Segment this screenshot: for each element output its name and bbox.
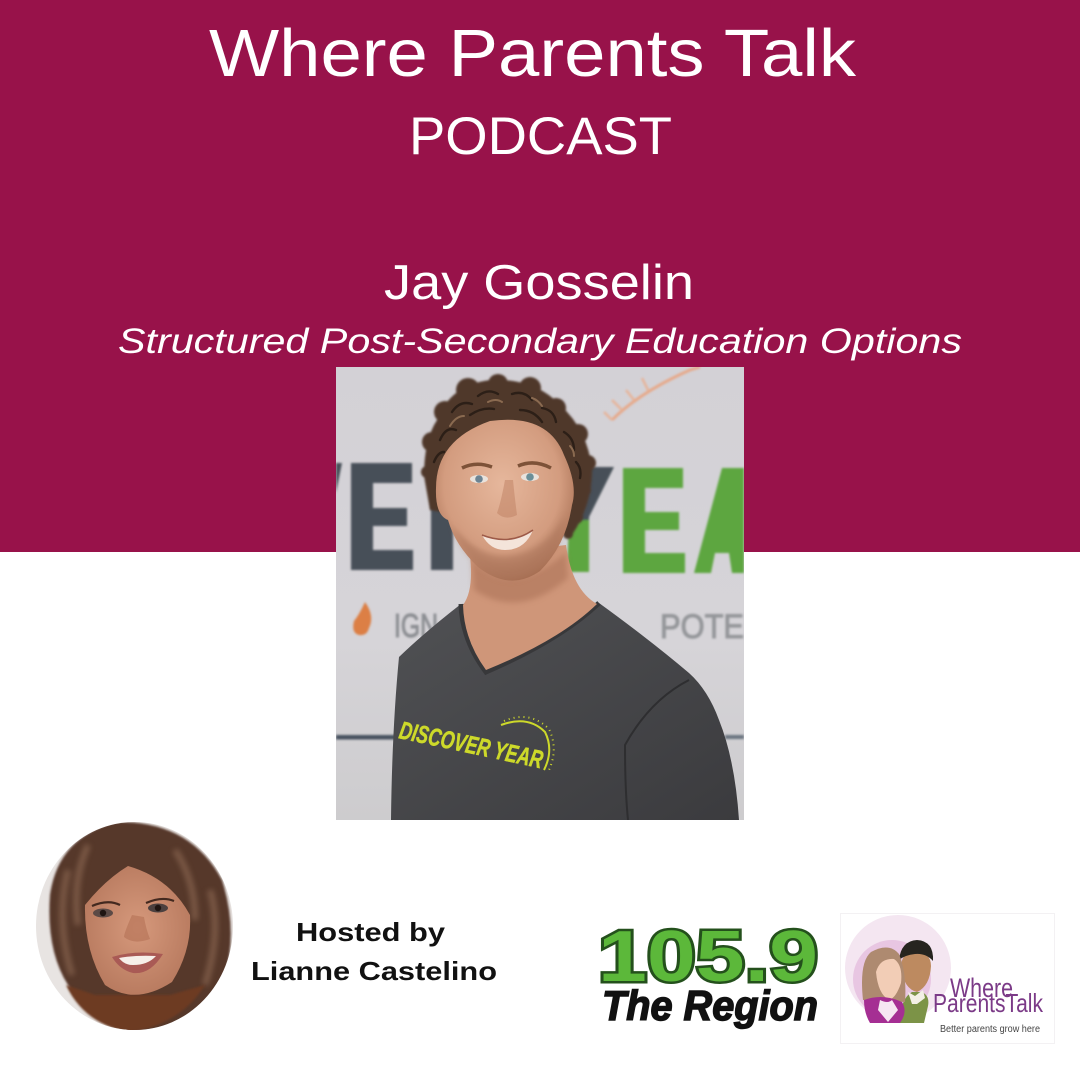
logo: boy bbox=[900, 992, 928, 1023]
header band bbox=[0, 0, 1080, 552]
title: Where Parents Talk bbox=[209, 16, 857, 91]
photo backdrop lettering bbox=[336, 367, 744, 740]
person: stubble shading bbox=[454, 527, 563, 570]
host hair bbox=[49, 822, 231, 1032]
person: shirt logo bbox=[397, 716, 554, 774]
person: brows, eyes, nose, smile bbox=[462, 463, 551, 550]
host portrait bbox=[30, 820, 240, 1035]
person: t-shirt bbox=[391, 603, 739, 820]
host credit: Hosted by bbox=[296, 917, 446, 947]
person: sleeve seam bbox=[625, 680, 689, 820]
person: neck bbox=[463, 545, 597, 670]
guest name: Jay Gosselin bbox=[384, 256, 694, 310]
person: hair highlights bbox=[450, 398, 574, 456]
logo wordmark: Where bbox=[950, 973, 1013, 1003]
person: neck shadow bbox=[472, 552, 568, 602]
person: hair curls bbox=[434, 391, 580, 478]
logo: 105.9 The Region bbox=[598, 917, 818, 1029]
logo: Where Parents Talk bbox=[840, 914, 1054, 1044]
subtitle: podcast: PODCAST bbox=[409, 107, 672, 166]
host face bbox=[85, 866, 190, 995]
logo: 105.9 The Region: 105.9 bbox=[598, 917, 818, 997]
host credit: Lianne Castelino bbox=[251, 956, 497, 986]
person: hair back bbox=[421, 374, 596, 539]
logo: Where Parents Talk: Better parents grow here bbox=[940, 1024, 1040, 1035]
person: shirt logo: DISCOVER YEAR bbox=[397, 716, 545, 774]
episode topic: Structured Post-Secondary Education Options bbox=[118, 322, 962, 361]
logo: 105.9 The Region: The Region bbox=[602, 982, 818, 1029]
photo backdrop lettering: IGN bbox=[394, 607, 438, 644]
host features bbox=[92, 899, 174, 973]
host highlights bbox=[62, 845, 215, 985]
person: face bbox=[436, 420, 574, 581]
logo: 105.9 The Region: The Region bbox=[602, 982, 818, 1029]
logo circles bbox=[845, 915, 951, 1021]
guest photo bbox=[336, 367, 744, 820]
logo: Where Parents Talk: ParentsTalk bbox=[933, 988, 1044, 1018]
host credit bbox=[251, 917, 497, 986]
photo backdrop lettering: POTE bbox=[660, 608, 744, 646]
logo: girl bbox=[862, 947, 905, 1002]
person: collar band bbox=[461, 603, 599, 672]
